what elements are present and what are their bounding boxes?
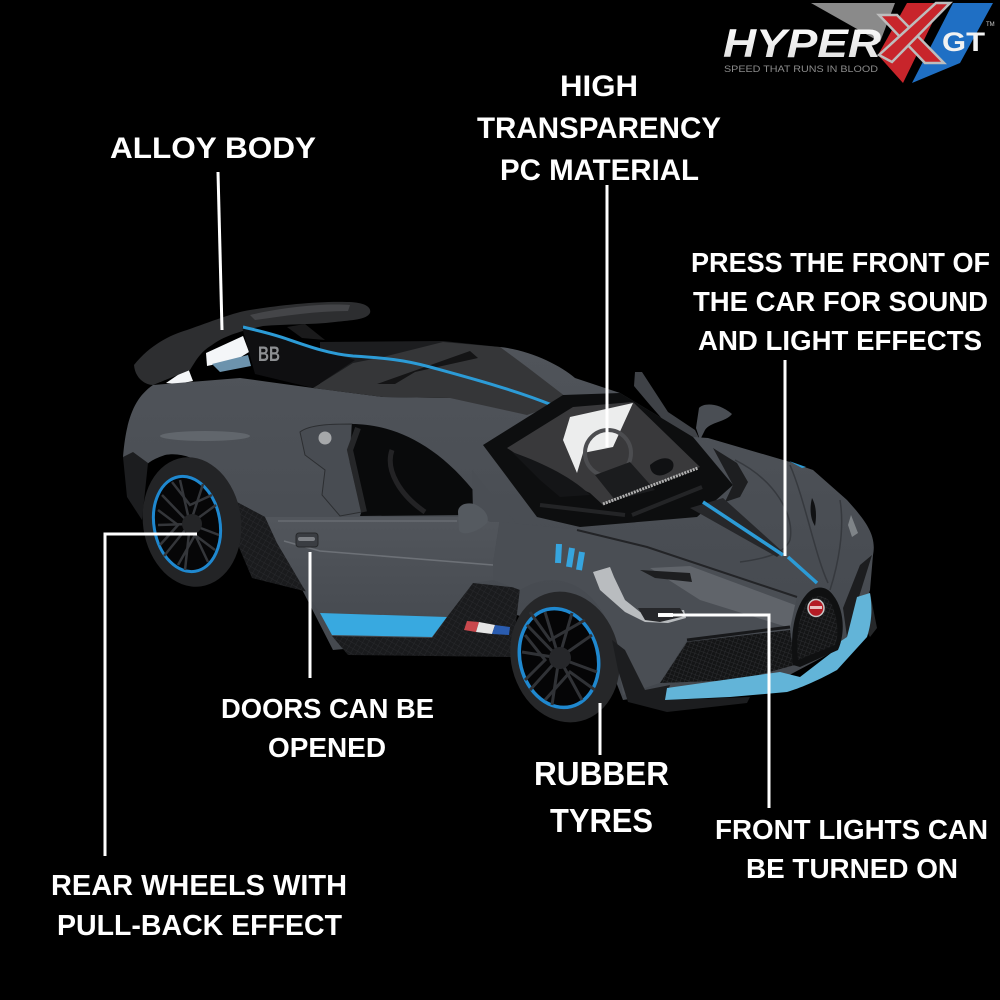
- callout: doors can be opened: [221, 552, 434, 763]
- callout: press front of the car: [691, 247, 990, 556]
- far side door and mirror: [634, 372, 732, 440]
- callout: doors can be opened: OPENED: [268, 732, 386, 763]
- hood seams: [735, 460, 842, 590]
- rear black tail: [123, 452, 148, 520]
- red badge: [808, 600, 824, 616]
- callout: rubber tyres: RUBBER: [534, 755, 669, 792]
- callout: press front of the car: PRESS THE FRONT OF: [691, 247, 990, 278]
- light blue door stripe: [320, 613, 447, 637]
- callout: high transparency PC material: PC MATERIAL: [500, 154, 699, 187]
- roof backing: [320, 341, 500, 400]
- callout: rear wheels pull-back: PULL-BACK EFFECT: [57, 910, 342, 942]
- logo: HyperX GT: [723, 3, 995, 83]
- callout: alloy body: ALLOY BODY: [110, 132, 316, 165]
- hood fender crease: [577, 530, 797, 597]
- mirror arm: [472, 470, 515, 522]
- car illustration: [123, 302, 877, 734]
- fender side dark vent: [640, 570, 692, 582]
- callout: front lights: [658, 615, 988, 884]
- logo: HyperX GT: HYPER: [723, 22, 881, 66]
- callout: high transparency PC material: TRANSPARENCY: [477, 112, 721, 145]
- front bumper dark edge: [612, 640, 750, 712]
- dark hood strip: [690, 498, 783, 557]
- logo: HyperX GT: GT: [942, 27, 986, 57]
- spoiler bright window gaps: [166, 336, 251, 384]
- callout: rubber tyres: TYRES: [550, 802, 653, 839]
- door open panel: [265, 517, 500, 617]
- callout: high transparency PC material: [477, 70, 721, 447]
- callout: press front of the car: THE CAR FOR SOUND: [693, 286, 988, 317]
- blue roof stripe: [243, 327, 552, 405]
- callout: rubber tyres: [534, 703, 669, 839]
- callout: rear wheels pull-back: REAR WHEELS WITH: [51, 870, 347, 902]
- windscreen: [483, 393, 733, 527]
- callout: rear wheels pull-back: [51, 534, 347, 942]
- far headlamp sliver: [848, 515, 858, 537]
- callout: press front of the car: AND LIGHT EFFECTS: [698, 325, 982, 356]
- silver fender crease: [650, 566, 795, 628]
- blue fender vents: [558, 544, 582, 570]
- callout: front lights: FRONT LIGHTS CAN: [715, 814, 988, 845]
- hood cowl: [713, 448, 748, 502]
- horseshoe grille: [792, 588, 843, 667]
- side mirror: [458, 503, 488, 533]
- carbon engine cover: [313, 342, 570, 415]
- blue hood stripe: [703, 502, 817, 583]
- lower front intake: [660, 627, 795, 683]
- door jamb and interior: [300, 424, 473, 516]
- front wheel: [497, 580, 633, 734]
- callout: alloy body: [110, 132, 316, 330]
- logo: HyperX GT: TM: [986, 22, 995, 28]
- callout: front lights: BE TURNED ON: [746, 853, 958, 884]
- engine tower black: [242, 327, 355, 388]
- far front grille side and tip: [843, 555, 877, 637]
- headlight: [593, 567, 686, 623]
- rear wheel: [134, 451, 250, 593]
- callout: doors can be opened: DOORS CAN BE: [221, 693, 434, 724]
- blue sliver on far wing: [789, 461, 806, 468]
- callout: high transparency PC material: HIGH: [560, 70, 638, 103]
- Bugatti rear emblem: BB: [258, 343, 280, 366]
- light blue splitter: [665, 593, 871, 700]
- rear highlight: [160, 431, 250, 441]
- carbon sill and tricolor flag: [332, 583, 520, 657]
- main body shell: [123, 347, 874, 700]
- carbon rear sill: [233, 500, 308, 592]
- front fender: [493, 522, 797, 695]
- rear spoiler: [134, 302, 370, 385]
- hood side vent: [811, 498, 816, 526]
- logo: HyperX GT: SPEED THAT RUNS IN BLOOD: [724, 64, 879, 74]
